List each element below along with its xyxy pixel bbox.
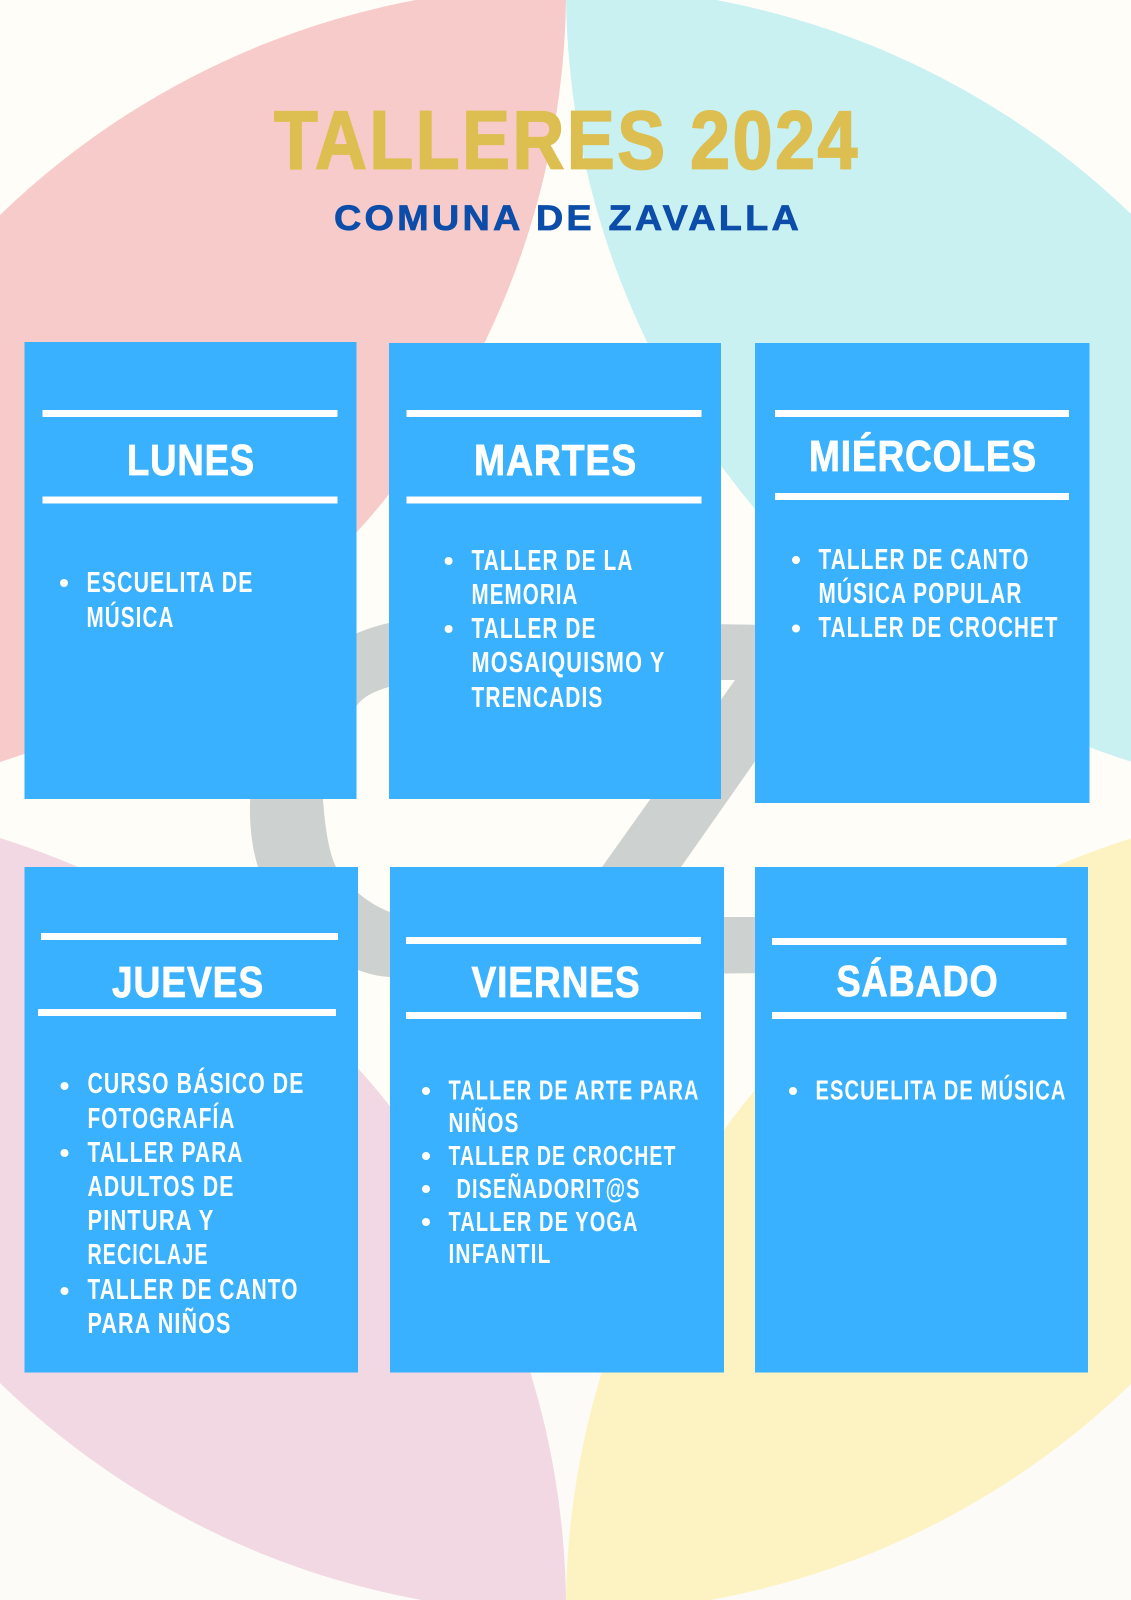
heading: sabado: SÁBADO [836, 956, 998, 1006]
panel: miercoles [755, 343, 1090, 803]
heading: jueves: JUEVES [112, 958, 264, 1007]
list: miercoles: TALLER DE CANTO [818, 544, 1030, 576]
subtitle: COMUNA DE ZAVALLA [334, 198, 802, 238]
list: viernes: DISEÑADORIT@S [456, 1173, 640, 1204]
list: viernes: INFANTIL [448, 1238, 552, 1269]
petal: pink top-left [0, 0, 566, 762]
list: martes [445, 545, 666, 714]
list: viernes: TALLER DE ARTE PARA [448, 1074, 700, 1106]
list: jueves: TALLER PARA [88, 1137, 244, 1169]
list: jueves [60, 1068, 304, 1340]
heading: miercoles: MIÉRCOLES [809, 431, 1037, 481]
panel: lunes [24, 342, 356, 799]
title: TALLERES 2024 [274, 94, 860, 186]
list: jueves: ADULTOS DE [88, 1171, 234, 1203]
petal: yellow bottom-right [566, 838, 1131, 1600]
panel: martes [389, 343, 721, 799]
list: martes: TALLER DE LA [472, 545, 634, 577]
heading: martes: MARTES [474, 436, 637, 485]
petal: pink bottom-left [0, 838, 566, 1600]
panel: viernes [390, 867, 724, 1372]
list: lunes [60, 567, 254, 634]
heading: lunes: LUNES [127, 436, 255, 485]
list: martes: TRENCADIS [472, 682, 604, 714]
list: miercoles: MÚSICA POPULAR [818, 578, 1022, 610]
petal: cyan top-right [566, 0, 1131, 762]
panel: sabado [755, 867, 1088, 1372]
list: jueves: FOTOGRAFÍA [88, 1103, 236, 1135]
list: lunes: ESCUELITA DE [86, 567, 254, 599]
list: viernes [422, 1074, 700, 1269]
list: lunes: MÚSICA [86, 602, 174, 634]
list: viernes: TALLER DE CROCHET [448, 1140, 676, 1171]
heading: viernes: VIERNES [472, 958, 640, 1007]
list: martes: TALLER DE [472, 613, 596, 645]
list: jueves: PINTURA Y [88, 1205, 214, 1237]
list: martes: MOSAIQUISMO Y [472, 647, 666, 679]
list: jueves: RECICLAJE [88, 1239, 208, 1271]
list: jueves: TALLER DE CANTO [88, 1274, 298, 1306]
list: jueves: PARA NIÑOS [88, 1308, 232, 1340]
list: jueves: CURSO BÁSICO DE [88, 1068, 304, 1100]
logo: grey ring and diagonal [250, 620, 770, 977]
list: viernes: NIÑOS [448, 1107, 520, 1138]
panel: jueves [24, 867, 358, 1372]
list: viernes: TALLER DE YOGA [448, 1206, 638, 1237]
list: martes: MEMORIA [472, 579, 578, 611]
list: miercoles [792, 544, 1058, 644]
